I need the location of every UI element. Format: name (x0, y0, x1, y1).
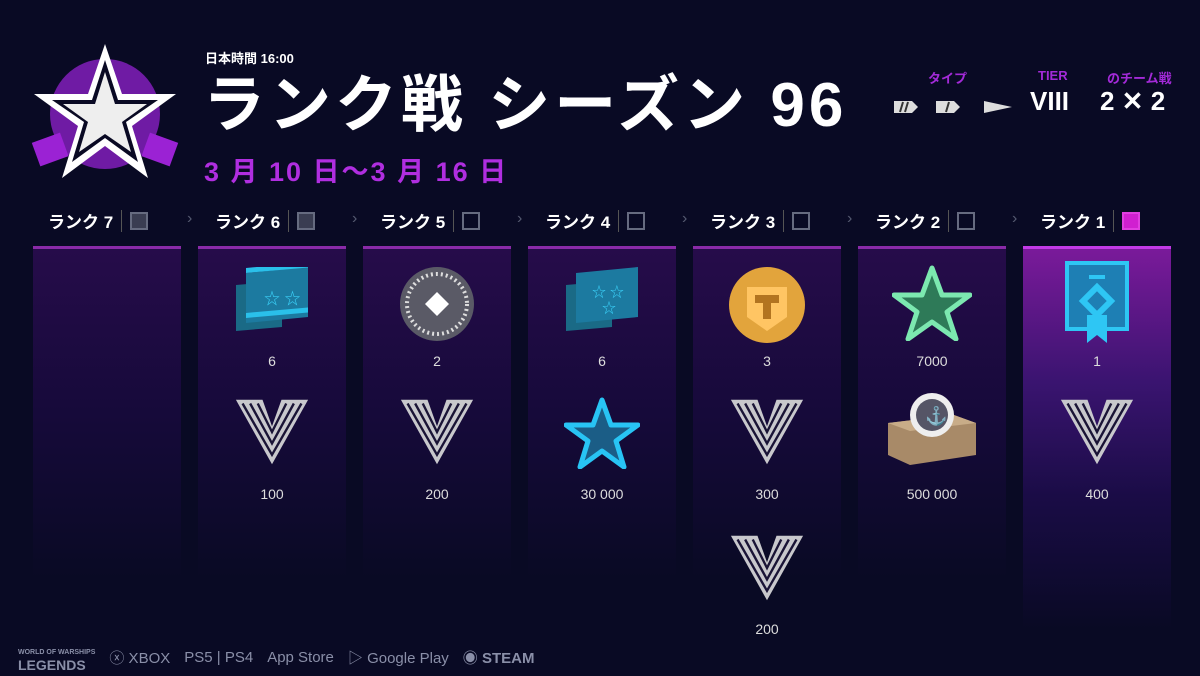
panel: rank 5 (363, 246, 511, 579)
panel: rank 6: 100 (260, 486, 284, 502)
text: ランク 5 (380, 213, 445, 232)
footer: platform logos (18, 648, 534, 673)
panel: rank 2: 7000 (916, 353, 948, 369)
panel: rank 7 (33, 246, 181, 579)
date: 3 月 10 日～3 月 16 日 (204, 157, 508, 187)
info: type / tier / team: TIER (1038, 68, 1068, 83)
icon: disc (400, 267, 474, 341)
panel: rank 6 (198, 246, 346, 579)
panel: rank 6: 6 (268, 353, 276, 369)
text: › (682, 210, 687, 227)
icon: flag 3 stars: ☆ (602, 300, 616, 316)
time label: 日本時間 16:00 (205, 51, 294, 66)
text: ランク 3 (710, 213, 775, 232)
text: ランク 1 (1040, 213, 1105, 232)
text: ランク 4 (545, 213, 610, 232)
footer: platform logos: WORLD OF WARSHIPS (18, 649, 95, 656)
footer: platform logos: ◉ STEAM (463, 650, 534, 666)
text: › (187, 210, 192, 227)
text: › (1012, 210, 1017, 227)
title: ランク戦 シーズン 96 (203, 71, 847, 140)
panel: rank 1: 1 (1093, 353, 1101, 369)
icon: flag: ☆ ☆ (264, 290, 300, 308)
panel: rank 2: 500 000 (907, 486, 957, 502)
icon: green star (892, 266, 972, 341)
panel: rank 4 (528, 246, 676, 579)
footer: platform logos: App Store (267, 648, 334, 666)
footer: platform logos: PS5 | PS4 (184, 648, 253, 666)
panel: rank 5: 200 (425, 486, 449, 502)
panel: rank 3 (693, 246, 841, 579)
text: ランク 2 (875, 213, 940, 232)
text: ランク 6 (215, 213, 280, 232)
icon: gold emblem (729, 267, 805, 343)
panel: rank 4: 6 (598, 353, 606, 369)
rank headers (48, 210, 148, 232)
logo: star emblem (32, 44, 178, 178)
icon: crate (888, 393, 976, 465)
info: type / tier / team: のチーム戦 (1107, 71, 1172, 86)
text: 200 (755, 621, 779, 637)
footer: platform logos: ▷ Google Play (348, 650, 449, 666)
panel: rank 3: 300 (755, 486, 779, 502)
icon: certificate (1065, 261, 1129, 343)
panel: rank 5: 2 (433, 353, 441, 369)
info: type / tier / team (894, 68, 1172, 116)
info: type / tier / team: 2 ✕ 2 (1100, 86, 1165, 116)
text: › (352, 210, 357, 227)
icon: crate: ⚓ (925, 405, 947, 426)
icon: flag 3 stars (566, 267, 638, 331)
text: › (517, 210, 522, 227)
icon: flag 3 stars: ☆ ☆ (592, 284, 624, 300)
icon: flag (236, 267, 308, 331)
panel: rank 1 (1023, 246, 1171, 629)
info: type / tier / team: VIII (1030, 86, 1069, 116)
footer: platform logos: ⓧ XBOX (109, 650, 170, 666)
text: › (847, 210, 852, 227)
panel: rank 1: 400 (1085, 486, 1109, 502)
panel: rank 2 (858, 246, 1006, 579)
panel: rank 4: 30 000 (581, 486, 623, 502)
rank headers: ランク 7 (48, 213, 113, 232)
icon: blue star (564, 398, 640, 469)
panel: rank 3: 3 (763, 353, 771, 369)
footer: platform logos: LEGENDS (18, 657, 86, 673)
info: type / tier / team: タイプ (928, 71, 967, 86)
